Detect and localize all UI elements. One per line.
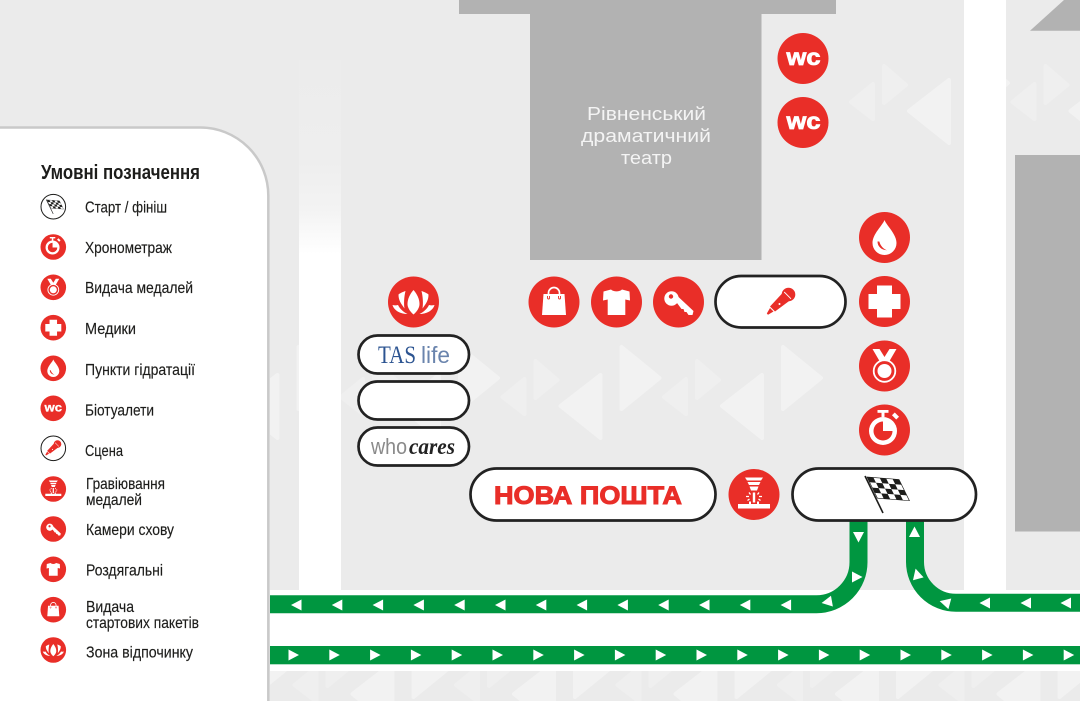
faint triangle pattern: centre xyxy=(180,347,821,438)
icon: toilet 2 xyxy=(778,97,828,148)
legend: hydration xyxy=(40,356,195,381)
icon: hydration xyxy=(859,212,910,263)
legend: start / finish xyxy=(41,194,167,219)
legend: storage: Камери схову xyxy=(86,522,174,539)
who cares sponsor pill xyxy=(358,428,469,466)
TAS life sponsor pill xyxy=(358,336,469,374)
legend: rest zone: Зона відпочинку xyxy=(86,644,193,662)
icon: toilet 2: wc xyxy=(785,108,821,134)
neighbouring buildings xyxy=(1015,0,1080,532)
who cares sponsor pill: who xyxy=(370,434,407,459)
TAS life sponsor pill: life xyxy=(421,342,450,368)
icon: medals xyxy=(859,340,910,392)
legend: hydration: Пункти гідратації xyxy=(85,362,195,379)
legend: medics xyxy=(40,315,136,341)
icon: toilet 1 xyxy=(778,33,828,84)
theatre label: драматичний xyxy=(581,126,711,146)
theatre label: Рівненський xyxy=(587,104,706,124)
legend: storage xyxy=(40,516,174,542)
icon: medal engraving xyxy=(728,469,780,520)
faint triangle pattern: bottom strip xyxy=(133,635,1080,701)
icon: timing xyxy=(859,404,910,456)
icon: starter packs xyxy=(528,276,580,328)
start / finish pill xyxy=(792,468,976,520)
icon: medics xyxy=(859,276,910,327)
legend: starter packs: стартових пакетів xyxy=(86,615,199,632)
legend: timing: Хронометраж xyxy=(85,240,172,257)
roads xyxy=(270,0,1080,671)
who cares sponsor pill: cares xyxy=(409,434,455,459)
icon: changing rooms xyxy=(591,276,642,328)
theatre label xyxy=(581,104,711,168)
icon: rest zone xyxy=(388,276,439,328)
icon: storage xyxy=(653,276,704,328)
legend: toilets: wc xyxy=(43,401,62,415)
legend: timing xyxy=(40,234,172,260)
legend title: Умовні позначення xyxy=(41,161,200,184)
legend: stage xyxy=(41,436,123,461)
legend panel xyxy=(0,127,268,701)
legend: medals xyxy=(40,274,193,300)
legend: medals: Видача медалей xyxy=(85,280,193,297)
route: lower track xyxy=(270,646,1080,664)
legend: engraving: Гравіювання xyxy=(86,476,165,493)
legend: engraving: медалей xyxy=(86,492,142,509)
legend: start / finish: Старт / фініш xyxy=(85,200,167,216)
legend: rest zone xyxy=(40,637,193,663)
legend: starter packs: Видача xyxy=(86,599,134,616)
legend: medics: Медики xyxy=(85,321,136,338)
blank sponsor pill xyxy=(358,382,469,420)
faint triangle pattern: top right xyxy=(851,52,1080,143)
theatre building xyxy=(459,0,836,260)
stage pill xyxy=(716,276,846,328)
legend: toilets xyxy=(40,396,154,421)
route: incoming track xyxy=(909,519,1080,609)
Nova Poshta sponsor pill xyxy=(470,468,716,520)
legend: engraving xyxy=(40,476,165,509)
legend: starter packs xyxy=(40,597,199,632)
TAS life sponsor pill: TAS xyxy=(378,342,416,369)
Nova Poshta sponsor pill: НОВА ПОШТА xyxy=(494,482,682,510)
route: outgoing track xyxy=(270,519,864,610)
legend: changing rooms: Роздягальні xyxy=(86,562,163,580)
icon: toilet 1: wc xyxy=(785,44,821,70)
legend: stage: Сцена xyxy=(85,443,123,460)
legend: toilets: Біотуалети xyxy=(85,402,154,420)
legend: changing rooms xyxy=(40,556,163,582)
theatre label: театр xyxy=(621,148,672,168)
